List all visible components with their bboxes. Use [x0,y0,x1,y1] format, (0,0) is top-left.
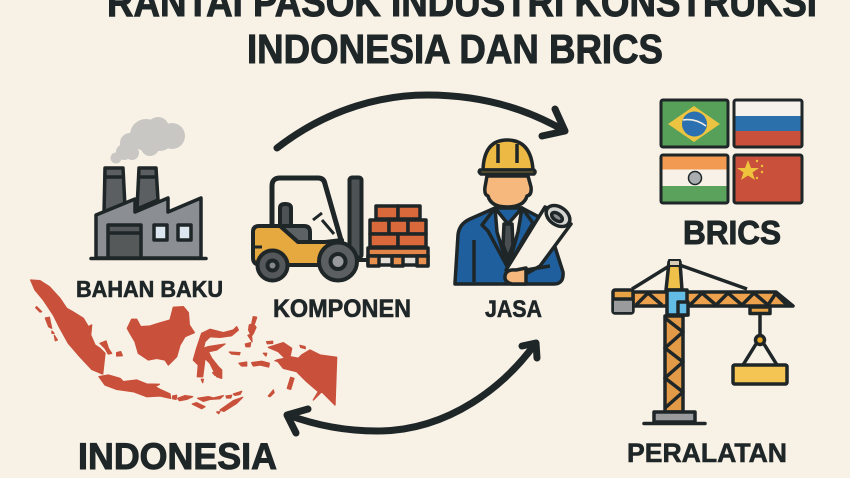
title: INDONESIA DAN BRICS [247,26,663,72]
label: indonesia: INDONESIA [78,436,277,477]
arrow: top curved arrow [277,95,565,148]
title [107,0,817,72]
label: bahan baku: BAHAN BAKU [76,276,223,302]
flag: India [661,155,728,203]
icon: factory [91,117,206,258]
label: BRICS: BRICS [683,214,781,251]
label: jasa: JASA [485,296,542,323]
icon: worker with blueprint [455,140,574,284]
bricks and pallet [368,206,428,266]
label: komponen: KOMPONEN [273,295,411,323]
arrow: bottom curved arrow [287,343,537,433]
icon: forklift with bricks [253,178,428,280]
map: Indonesia [31,280,337,414]
flag: Russia [734,100,802,147]
flag: Brazil [661,100,728,147]
label: peralatan: PERALATAN [627,438,787,468]
smoke [110,117,185,164]
flags: BRICS [661,100,802,203]
icon: tower crane [613,260,793,424]
flag: China [734,155,802,203]
